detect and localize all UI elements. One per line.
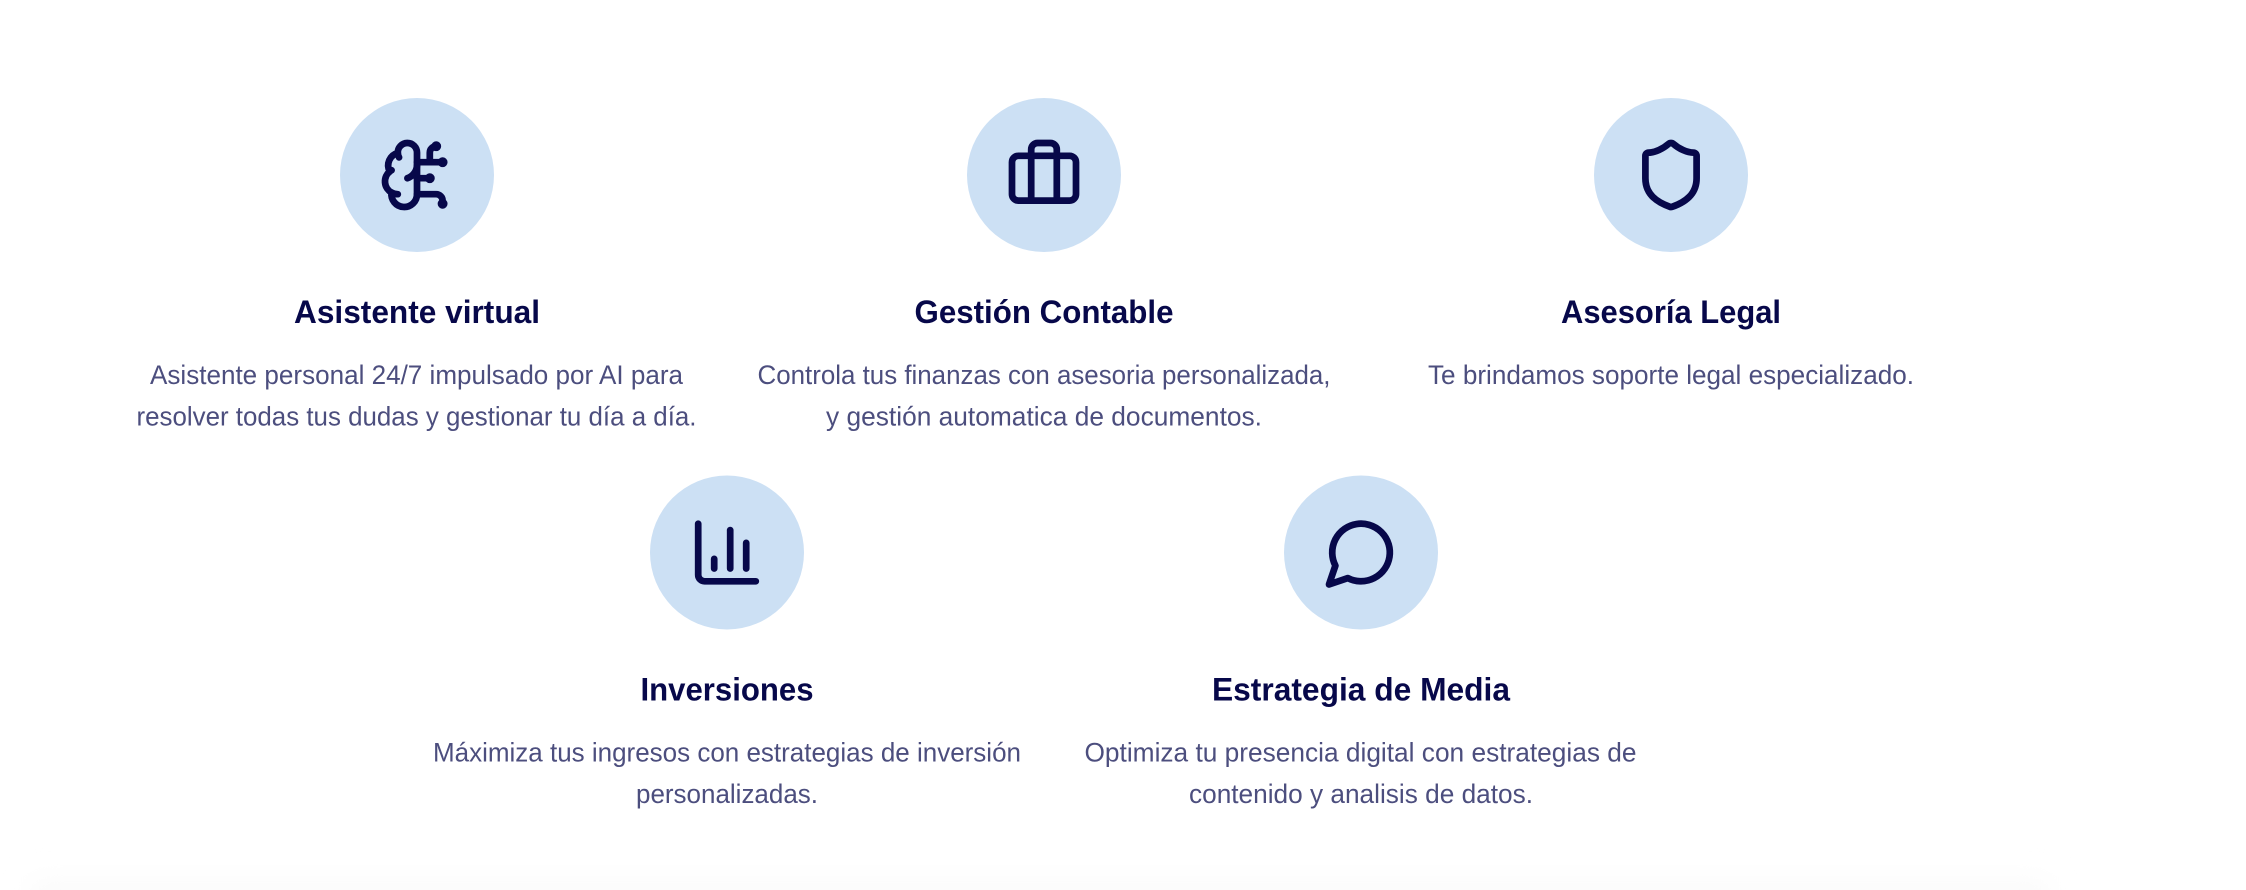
description: Asistente virtual: resolver todas tus dudas y gestionar tu día a día. xyxy=(136,402,696,432)
description: Gestión Contable xyxy=(758,360,1330,432)
description: Inversiones: Máximiza tus ingresos con estrategias de inversión xyxy=(433,738,1021,768)
description: Estrategia de Media: contenido y analisis de datos. xyxy=(1189,779,1533,809)
icon: bar chart in blue circle xyxy=(650,476,804,630)
heading: Asistente virtual: Asistente virtual xyxy=(294,294,540,330)
description: Asistente virtual: Asistente personal 24/7 impulsado por AI para xyxy=(150,360,684,390)
description: Inversiones: personalizadas. xyxy=(636,779,818,809)
panel: Inversiones xyxy=(433,476,1021,809)
heading: Gestión Contable: Gestión Contable xyxy=(914,294,1174,330)
panel: Asesoría Legal xyxy=(1428,98,1914,390)
description: Inversiones xyxy=(433,738,1021,809)
description: Estrategia de Media xyxy=(1084,738,1636,809)
panel: Asistente virtual xyxy=(136,98,696,432)
icon: shield in blue circle xyxy=(1594,98,1748,252)
description: Asesoría Legal: Te brindamos soporte legal especializado. xyxy=(1428,360,1914,390)
heading: Inversiones: Inversiones xyxy=(640,672,814,708)
description: Gestión Contable: y gestión automatica de documentos. xyxy=(826,402,1262,432)
icon: speech bubble in blue circle xyxy=(1284,476,1438,630)
icon: briefcase in blue circle xyxy=(967,98,1121,252)
description: Asistente virtual xyxy=(136,360,696,432)
panel: Gestión Contable xyxy=(758,98,1330,432)
heading: Estrategia de Media: Estrategia de Media xyxy=(1212,672,1510,708)
description: Estrategia de Media: Optimiza tu presencia digital con estrategias de xyxy=(1084,738,1636,768)
panel: Estrategia de Media xyxy=(1084,476,1636,809)
heading: Asesoría Legal: Asesoría Legal xyxy=(1561,294,1781,330)
icon: brain circuit in blue circle xyxy=(340,98,494,252)
description: Gestión Contable: Controla tus finanzas con asesoria personalizada, xyxy=(758,360,1330,390)
